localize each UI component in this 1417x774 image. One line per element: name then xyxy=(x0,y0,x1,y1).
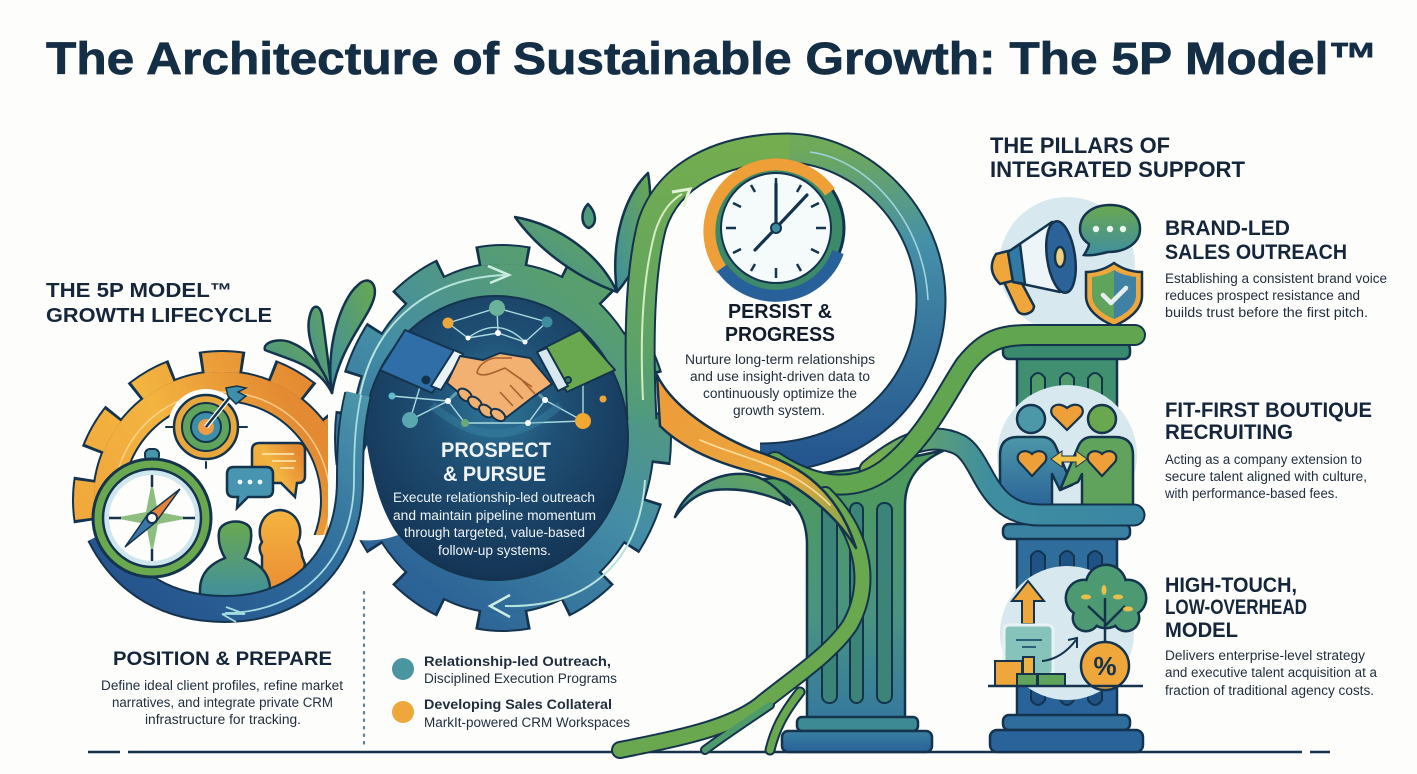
prospect text: through targeted, value-based xyxy=(404,525,585,540)
persist text: Nurture long-term relationships xyxy=(685,352,875,367)
icon: megaphone xyxy=(992,219,1080,314)
prospect text xyxy=(393,490,596,558)
position description: infrastructure for tracking. xyxy=(145,712,301,727)
legend item: outreach xyxy=(392,654,617,686)
heading: growth lifecycle xyxy=(46,280,272,327)
icon: growth arrow xyxy=(1042,638,1077,661)
brand heading: BRAND-LED xyxy=(1165,217,1290,240)
recruiting heading: FIT-FIRST BOUTIQUE xyxy=(1165,399,1372,422)
recruiting description xyxy=(1164,452,1367,501)
position heading: POSITION & PREPARE xyxy=(113,648,332,670)
persist text: continuously optimize the xyxy=(703,386,857,401)
support icon circle: recruiting xyxy=(997,385,1137,525)
growth ring xyxy=(640,148,931,458)
orange swoosh xyxy=(657,375,856,548)
position and prepare text xyxy=(101,648,343,727)
blue-green gear xyxy=(340,255,661,621)
persist heading xyxy=(725,301,835,346)
legend item: outreach: Relationship-led Outreach, xyxy=(424,654,611,669)
legend item: collateral: Developing Sales Collateral xyxy=(424,697,612,712)
model description: fraction of traditional agency costs. xyxy=(1165,683,1374,698)
pillar capitals and base xyxy=(990,343,1143,752)
icon: speech bubble xyxy=(1080,205,1140,255)
support icon circle: brand outreach xyxy=(992,197,1142,333)
persist text: and use insight-driven data to xyxy=(690,369,870,384)
persist heading: PROGRESS xyxy=(725,324,835,346)
orange gear xyxy=(72,350,328,535)
vines and shelves xyxy=(620,335,1135,750)
recruiting description: secure talent aligned with culture, xyxy=(1165,469,1367,484)
position description: Define ideal client profiles, refine market xyxy=(101,678,343,693)
title: The Architecture of Sustainable Growth: The 5P Model™ xyxy=(46,33,1378,84)
brand description: Establishing a consistent brand voice xyxy=(1165,271,1387,286)
icon: compass xyxy=(93,449,211,577)
legend item: collateral: MarkIt-powered CRM Workspaces xyxy=(424,715,630,730)
icon: percent coin xyxy=(1081,642,1129,690)
prospect heading: PROSPECT xyxy=(441,439,551,462)
legend item: collateral xyxy=(392,697,630,730)
panel: position and prepare gear xyxy=(84,362,361,638)
model description xyxy=(1165,648,1377,698)
prospect text: Execute relationship-led outreach xyxy=(393,490,595,505)
icon: percent coin: % xyxy=(1093,651,1117,681)
brand heading xyxy=(1165,217,1347,264)
shelf vine lower xyxy=(870,439,1134,515)
model description: Delivers enterprise-level strategy xyxy=(1165,648,1365,663)
support icon circle: high-touch xyxy=(988,564,1148,700)
text block: high-touch low-overhead model xyxy=(1165,574,1377,698)
icon: two people xyxy=(200,510,305,600)
recruiting heading: RECRUITING xyxy=(1165,421,1293,444)
icon: tablet and boxes xyxy=(995,625,1065,686)
brand heading: SALES OUTREACH xyxy=(1165,241,1347,264)
right pillar xyxy=(990,343,1143,752)
text block: fit-first boutique recruiting xyxy=(1164,399,1372,501)
icon: exchange arrow xyxy=(1051,451,1087,467)
prospect heading: & PURSUE xyxy=(443,463,546,486)
heading: growth lifecycle: GROWTH LIFECYCLE xyxy=(46,305,272,327)
shelf vine upper xyxy=(775,335,1135,485)
recruiting heading xyxy=(1165,399,1372,444)
pillar shafts xyxy=(1017,355,1117,718)
icon: clock xyxy=(708,160,844,296)
pillar: left column xyxy=(755,450,945,752)
icon: hearts xyxy=(1018,405,1116,476)
icon: handshake xyxy=(380,330,615,424)
recruiting description: Acting as a company extension to xyxy=(1165,452,1362,467)
persist text xyxy=(685,352,875,418)
model description: and executive talent acquisition at a xyxy=(1165,665,1377,680)
bottom baseline xyxy=(88,751,1330,753)
leaves between gears xyxy=(265,281,375,393)
icon: shield xyxy=(1086,263,1142,326)
icon: speech bubbles xyxy=(227,443,305,508)
prospect text: follow-up systems. xyxy=(438,543,551,558)
legend item: outreach: Disciplined Execution Programs xyxy=(424,671,617,686)
heading: pillars of integrated support: INTEGRATED SUPPORT xyxy=(990,157,1246,182)
brand description: reduces prospect resistance and xyxy=(1165,288,1360,303)
root vine xyxy=(620,495,862,750)
brand description xyxy=(1165,271,1387,320)
heading: pillars of integrated support: THE PILLARS OF xyxy=(990,133,1170,158)
icon: tree xyxy=(1064,564,1148,644)
icon: target with arrow xyxy=(166,386,247,468)
model heading: LOW-OVERHEAD xyxy=(1165,596,1307,619)
heading: growth lifecycle: THE 5P MODEL™ xyxy=(46,280,232,302)
dotted divider xyxy=(363,592,365,746)
text block: brand-led sales outreach xyxy=(1165,217,1387,320)
leaves above gear xyxy=(515,173,650,292)
panel: persist and progress ring xyxy=(640,148,931,458)
recruiting description: with performance-based fees. xyxy=(1164,486,1338,501)
column base xyxy=(782,717,932,752)
blue swoosh arrow xyxy=(100,394,361,622)
prospect text: and maintain pipeline momentum xyxy=(393,508,596,523)
position description xyxy=(101,678,343,727)
model heading: HIGH-TOUCH, xyxy=(1165,574,1297,597)
persist text: growth system. xyxy=(733,403,825,418)
leaf on vine xyxy=(675,474,790,517)
brand description: builds trust before the first pitch. xyxy=(1165,305,1368,320)
column flutes xyxy=(822,503,892,703)
persist heading: PERSIST & xyxy=(728,301,832,323)
icon: up arrow xyxy=(1012,581,1044,624)
heading: pillars of integrated support xyxy=(990,133,1246,182)
icon: two colleagues xyxy=(1000,405,1133,507)
prospect heading xyxy=(441,439,551,486)
network diagram xyxy=(388,300,606,434)
legend xyxy=(392,654,630,730)
model heading xyxy=(1165,574,1307,642)
model heading: MODEL xyxy=(1165,619,1238,642)
panel: prospect and pursue gear xyxy=(340,255,661,621)
position description: narratives, and integrate private CRM xyxy=(112,695,333,710)
